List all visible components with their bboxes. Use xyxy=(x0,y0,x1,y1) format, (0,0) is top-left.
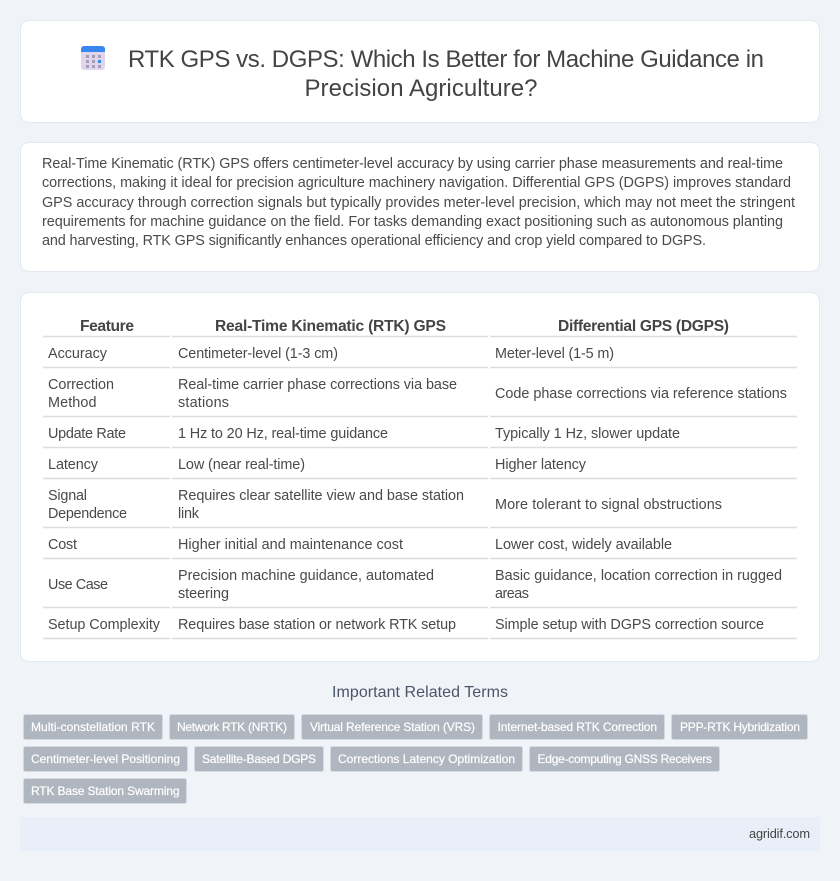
footer xyxy=(20,817,820,851)
title: RTK GPS vs. DGPS: Which Is Better for Machine Guidance in xyxy=(128,46,764,73)
tag xyxy=(330,746,522,772)
row: setup complexity xyxy=(48,617,764,633)
row: setup complexity: Requires base station or network RTK setup xyxy=(178,617,456,633)
text block: introduction: requirements for machine guidance on the field. For tasks demanding exact positioning such as autonomous planting xyxy=(42,214,783,230)
row: accuracy: Centimeter-level (1-3 cm) xyxy=(178,346,338,362)
tag: Network RTK (NRTK) xyxy=(177,720,287,734)
title xyxy=(128,46,764,102)
row: cost: Higher initial and maintenance cost xyxy=(178,537,403,553)
row: correction method: stations xyxy=(178,395,229,411)
row: accuracy: Accuracy xyxy=(48,346,108,362)
panel: title card xyxy=(20,20,820,122)
tag xyxy=(672,714,808,740)
tag xyxy=(170,714,294,740)
tag: Internet-based RTK Correction xyxy=(498,720,657,734)
icon: calendar xyxy=(81,46,105,70)
row: cost xyxy=(48,537,672,553)
table header: Real-Time Kinematic (RTK) GPS xyxy=(215,318,446,335)
row: signal dependence xyxy=(48,488,722,522)
tag: Edge-computing GNSS Receivers xyxy=(538,752,712,766)
row: use case xyxy=(48,568,782,602)
row: correction method: Code phase corrections via reference stations xyxy=(495,386,787,402)
tag: Multi-constellation RTK xyxy=(31,720,155,734)
table header xyxy=(80,318,729,335)
footer: agridif.com xyxy=(749,826,810,841)
text block: introduction: and harvesting, RTK GPS significantly enhances operational efficiency and crop yield compared to DGPS. xyxy=(42,233,706,249)
tag xyxy=(24,714,162,740)
tags: related terms xyxy=(24,714,808,804)
row: signal dependence: Dependence xyxy=(48,506,127,522)
row: correction method: Method xyxy=(48,395,96,411)
text block: introduction: Real-Time Kinematic (RTK) GPS offers centimeter-level accuracy by using carrier phase measurements and real-time xyxy=(42,156,783,172)
tag: Virtual Reference Station (VRS) xyxy=(310,720,475,734)
row: cost: Lower cost, widely available xyxy=(495,537,672,553)
panel: comparison table xyxy=(20,292,820,662)
row: update rate: 1 Hz to 20 Hz, real-time guidance xyxy=(178,426,388,442)
tag xyxy=(302,714,482,740)
text block: introduction: corrections, making it ideal for precision agriculture machinery navigation. Differential GPS (DGPS) improves standard xyxy=(42,175,791,191)
row: signal dependence: Signal xyxy=(48,488,87,504)
row: update rate xyxy=(48,426,680,442)
tag: Centimeter-level Positioning xyxy=(31,752,180,766)
row: setup complexity: Setup Complexity xyxy=(48,617,161,633)
tag: PPP-RTK Hybridization xyxy=(680,720,800,734)
row: accuracy xyxy=(48,346,614,362)
table header: Feature xyxy=(80,318,134,335)
row: accuracy: Meter-level (1-5 m) xyxy=(495,346,614,362)
tag: RTK Base Station Swarming xyxy=(31,784,180,798)
row: signal dependence: More tolerant to signal obstructions xyxy=(495,497,722,513)
row: update rate: Typically 1 Hz, slower update xyxy=(495,426,680,442)
row: latency: Latency xyxy=(48,457,99,473)
row: use case: steering xyxy=(178,586,229,602)
row: signal dependence: link xyxy=(178,506,200,522)
row: latency xyxy=(48,457,587,473)
tag xyxy=(24,778,186,804)
row: use case: Basic guidance, location correction in rugged xyxy=(495,568,782,584)
row: use case: areas xyxy=(495,586,529,602)
text block: introduction: GPS accuracy through correction signals but typically provides meter-level precision, which may not meet the stringent xyxy=(42,195,795,211)
row: use case: Precision machine guidance, automated xyxy=(178,568,434,584)
tag: Corrections Latency Optimization xyxy=(338,752,515,766)
row: latency: Higher latency xyxy=(495,457,587,473)
tag xyxy=(530,746,720,772)
heading: related terms: Important Related Terms xyxy=(332,684,508,701)
text block: introduction xyxy=(42,156,795,249)
tag xyxy=(24,746,188,772)
row: use case: Use Case xyxy=(48,577,108,593)
row: update rate: Update Rate xyxy=(48,426,126,442)
tag xyxy=(194,746,324,772)
row: correction method xyxy=(48,377,787,411)
title: Precision Agriculture? xyxy=(304,75,538,102)
row: correction method: Real-time carrier phase corrections via base xyxy=(178,377,457,393)
panel: introduction xyxy=(20,142,820,272)
row: setup complexity: Simple setup with DGPS correction source xyxy=(495,617,764,633)
row: signal dependence: Requires clear satellite view and base station xyxy=(178,488,464,504)
row: correction method: Correction xyxy=(48,377,114,393)
table header: Differential GPS (DGPS) xyxy=(558,318,729,335)
tag xyxy=(490,714,664,740)
tag: Satellite-Based DGPS xyxy=(202,752,316,766)
row: cost: Cost xyxy=(48,537,77,553)
row: latency: Low (near real-time) xyxy=(178,457,305,473)
